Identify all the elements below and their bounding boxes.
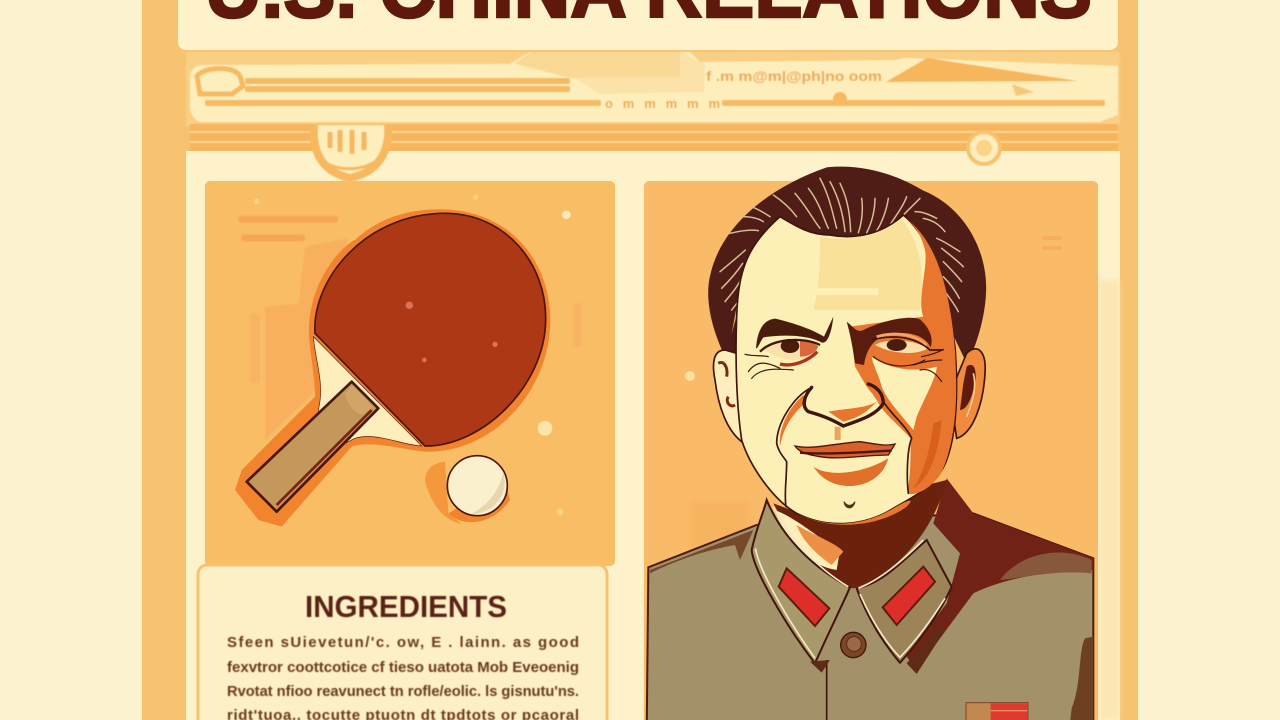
mouth	[795, 442, 895, 486]
collar drop shadow	[810, 627, 945, 674]
left eyebrow	[756, 317, 833, 348]
right red collar tab	[883, 567, 935, 625]
right collar flap	[857, 540, 952, 663]
head	[708, 167, 986, 525]
panel: title banner	[178, 0, 1118, 50]
header garbled caption: f .m m@m|@ph|no oom	[706, 68, 882, 84]
forehead midtone	[813, 218, 922, 310]
left red collar tab	[779, 568, 829, 626]
ball	[447, 456, 507, 516]
header dots row: o m m m m m	[605, 96, 720, 111]
background marks	[1042, 236, 1062, 250]
collar button	[841, 632, 866, 658]
panel: paddle illustration	[205, 181, 615, 566]
heading: ingredients: INGREDIENTS	[305, 589, 507, 624]
uniform jacket	[647, 513, 1093, 720]
arm seam	[1070, 637, 1093, 720]
panel: decorative header band	[186, 52, 1120, 126]
paddle blade	[315, 213, 546, 446]
ingredients body text: fexvtror coottcotice cf tieso uatota Mob Eveoenig	[227, 659, 579, 676]
faded background marks	[238, 216, 581, 440]
placket line	[824, 660, 829, 720]
sparkles	[562, 210, 571, 219]
face base	[736, 215, 957, 524]
panel: poster frame	[142, 0, 1138, 720]
hair	[708, 167, 986, 363]
chin dimple	[844, 502, 855, 508]
icon: table tennis paddle and ball	[235, 195, 581, 527]
cheek fold and jaw lines	[777, 387, 912, 507]
left ear	[713, 350, 747, 442]
orange halo	[235, 209, 550, 527]
jaw shadow	[797, 501, 911, 525]
ingredients body text: Sfeen sUievetun/'c. ow, E . lainn. as good	[227, 634, 579, 651]
ingredients body text	[227, 634, 579, 720]
nose	[804, 384, 883, 440]
cream cheek	[872, 357, 937, 430]
neck shadow	[773, 480, 947, 588]
hair comb strands	[720, 178, 963, 312]
right eye	[872, 334, 943, 353]
face shadow	[850, 216, 956, 494]
paddle neck	[313, 337, 422, 447]
panel: portrait illustration	[644, 167, 1098, 720]
right ear	[950, 349, 985, 438]
decorative stripes	[190, 124, 1118, 151]
panel: main sheet	[186, 151, 1120, 720]
panel: ingredients card	[198, 565, 607, 720]
icon: header emblem	[314, 125, 388, 178]
icon: header ring	[968, 132, 1000, 164]
breast pocket ribbon	[966, 703, 1028, 720]
uniform	[647, 478, 1093, 720]
sparkle	[685, 371, 695, 381]
shoulder shadow	[650, 530, 753, 573]
left eye	[760, 339, 820, 365]
left collar flap	[752, 500, 850, 663]
eye wrinkles	[745, 349, 943, 382]
ingredients body text: Rvotat nfioo reavunect tn rofle/eolic. ls gisnutu'ns.	[227, 683, 579, 700]
paddle handle	[247, 382, 378, 512]
right eyebrow	[847, 318, 932, 365]
